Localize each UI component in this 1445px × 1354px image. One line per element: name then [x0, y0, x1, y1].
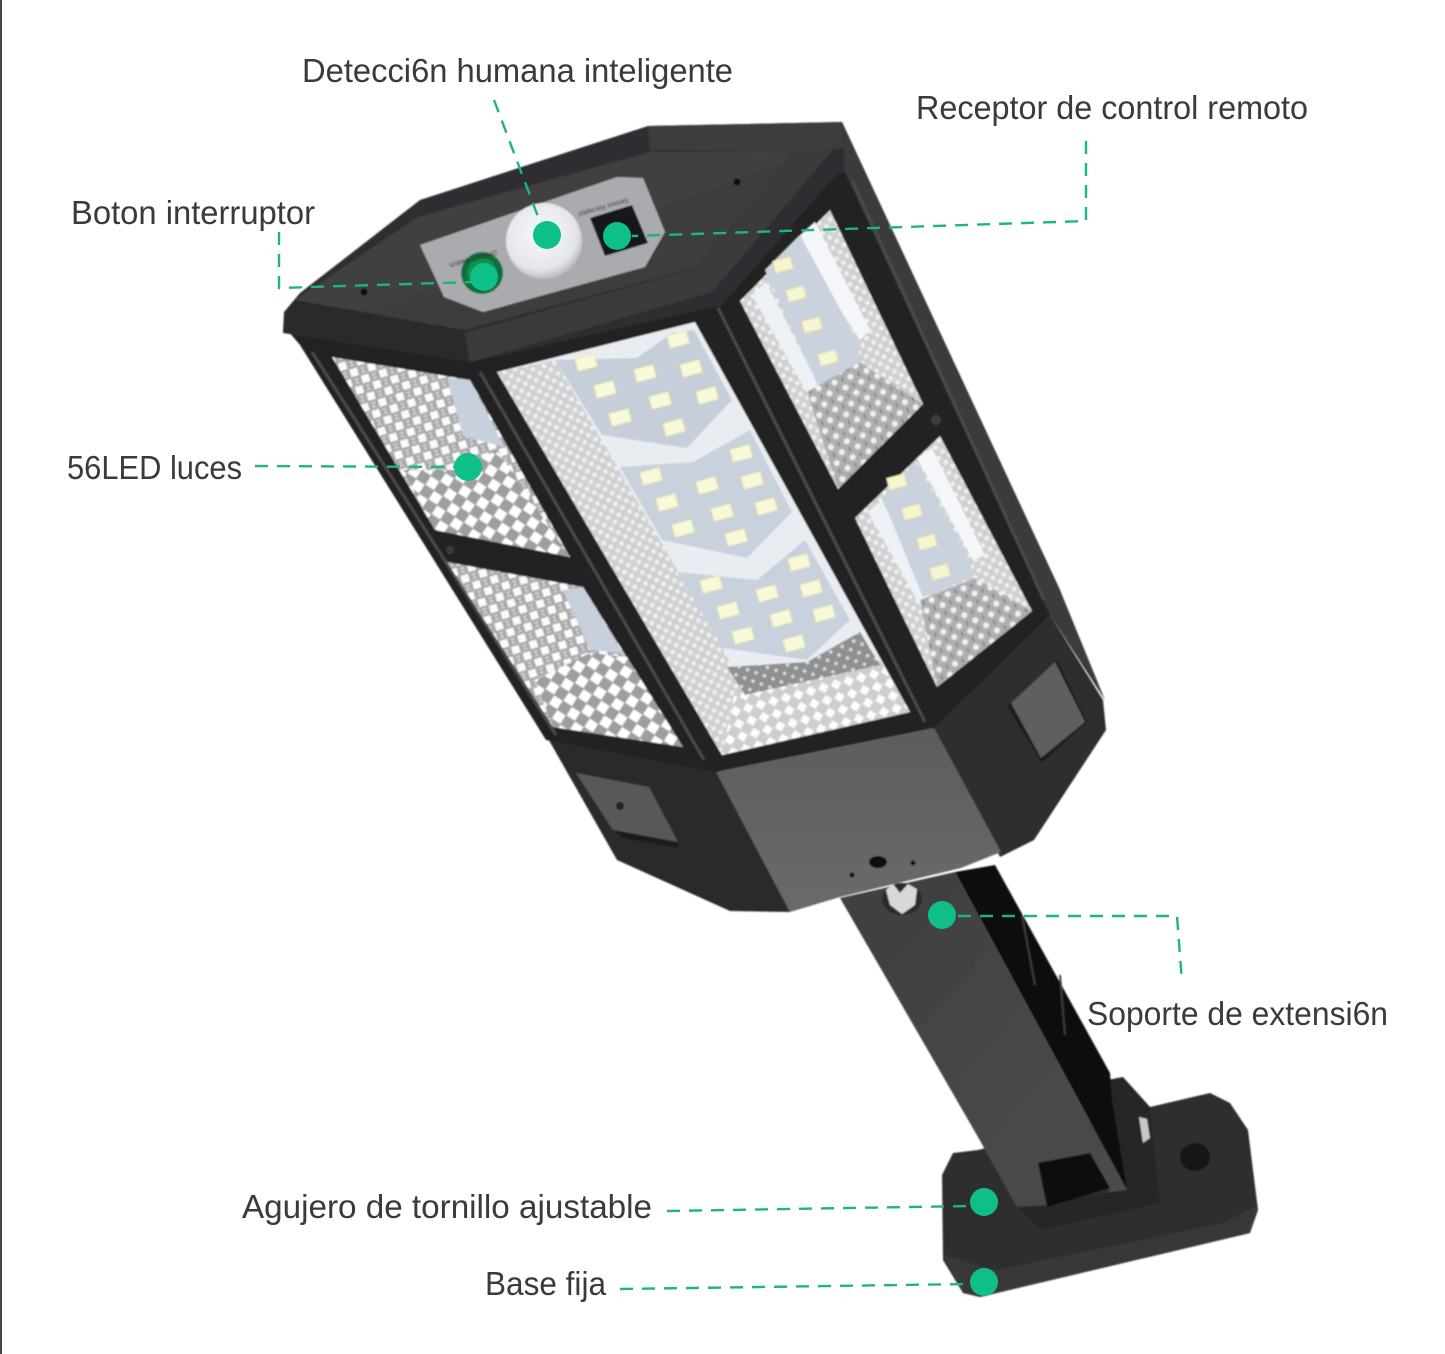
speckled band	[727, 632, 880, 695]
base plate	[942, 1093, 1258, 1297]
right window divider screw	[931, 415, 941, 425]
pivot screw	[1139, 1117, 1150, 1143]
led board glimpse	[563, 587, 623, 653]
switch button	[461, 252, 503, 294]
PIR sensor dome	[506, 203, 582, 279]
callout: switch button: Boton interruptor	[71, 194, 315, 231]
arm ribbed side	[955, 865, 1127, 1190]
left lower window	[447, 562, 683, 747]
callout: adjustable screw hole: Agujero de tornillo ajustable	[242, 1188, 652, 1225]
led board 2	[620, 430, 792, 558]
arm front face	[840, 872, 1127, 1207]
callout: switch button	[71, 194, 498, 291]
led board glimpse	[447, 378, 504, 447]
plate label: receiver: Sensor Receptor	[576, 196, 629, 217]
block holes	[850, 856, 916, 878]
bright lens zone	[535, 653, 683, 747]
speckled lens	[920, 578, 1032, 687]
bright lens zone	[403, 450, 570, 557]
callout: LED count: 56LED luces	[67, 449, 242, 486]
right upper window	[740, 210, 923, 489]
arm slot	[1038, 1153, 1110, 1207]
right outer rim	[842, 122, 1105, 700]
remote receiver window	[590, 205, 648, 256]
cap screw holes	[360, 178, 740, 296]
led board	[765, 235, 860, 390]
fine lens strip	[497, 360, 745, 755]
lamp housing	[283, 122, 1106, 915]
led board	[883, 463, 973, 597]
left square cover	[576, 773, 678, 848]
bottom lens strip	[722, 660, 910, 755]
callout: remote receiver	[603, 89, 1308, 250]
callout: remote receiver: Receptor de control remoto	[916, 89, 1308, 126]
extension bolt	[882, 883, 922, 915]
base front lip	[943, 1205, 1258, 1297]
top cap	[283, 122, 845, 362]
callout: LED count	[67, 449, 482, 486]
mounting hole	[1180, 1143, 1210, 1171]
callout: detection sensor: Detecci6n humana inteligente	[302, 52, 733, 89]
left window divider screw	[446, 546, 454, 554]
right lower window	[855, 436, 1032, 687]
LEDs	[887, 474, 950, 580]
pivot lug	[1017, 1077, 1160, 1230]
callout: detection sensor	[302, 52, 733, 249]
cap top face	[295, 152, 793, 330]
right square cover	[1007, 660, 1087, 763]
cap outer shape	[283, 122, 845, 362]
mounting bracket	[840, 865, 1258, 1297]
cap upper rim	[648, 122, 843, 152]
central LEDs	[575, 331, 835, 652]
solar lamp product illustration	[283, 122, 1258, 1297]
central window	[497, 322, 910, 755]
left upper window	[332, 357, 570, 557]
callout: fixed base	[485, 1265, 998, 1302]
central glass background	[497, 322, 910, 755]
frame detail lines	[312, 180, 1044, 760]
right lower side panel	[930, 615, 1106, 857]
led board 1	[555, 330, 732, 448]
left edge strip	[0, 0, 2, 1354]
left lower side panel	[546, 735, 790, 912]
cap front band	[462, 147, 835, 362]
LEDs	[773, 257, 838, 366]
led board 3	[677, 540, 850, 660]
callout: extension bracket	[928, 901, 1388, 1032]
callout: adjustable screw hole	[242, 1188, 998, 1225]
speckled lens	[807, 362, 923, 489]
callout: fixed base: Base fija	[485, 1265, 607, 1302]
plate label: switch: ON/OFF Switch	[448, 248, 497, 268]
front grey block	[716, 728, 1001, 912]
control plate	[420, 177, 665, 312]
callout: extension bracket: Soporte de extensi6n	[1087, 995, 1388, 1032]
window frames body	[283, 122, 1060, 772]
